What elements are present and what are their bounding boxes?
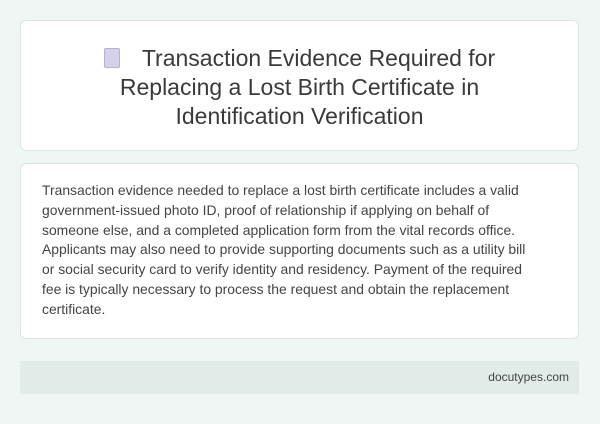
- description text: [42, 182, 525, 317]
- description text: Transaction evidence needed to replace a lost birth certificate includes a valid: [42, 182, 519, 198]
- footer source: docutypes.com: [488, 370, 569, 384]
- icon: document: [104, 48, 120, 68]
- footer bar: [20, 361, 579, 394]
- description panel: [20, 163, 579, 339]
- description text: certificate.: [42, 301, 105, 317]
- description text: or social security card to verify identity and residency. Payment of the required: [42, 261, 522, 277]
- description text: fee is typically necessary to process the request and obtain the replacement: [42, 281, 509, 297]
- title: Transaction Evidence Required for Replacing a Lost Birth Certificate in Identification Verification: [120, 45, 495, 129]
- description text: government-issued photo ID, proof of relationship if applying on behalf of: [42, 202, 489, 218]
- title panel: [20, 20, 579, 151]
- description text: Applicants may also need to provide supporting documents such as a utility bill: [42, 241, 525, 257]
- description text: someone else, and a completed application form from the vital records office.: [42, 222, 515, 238]
